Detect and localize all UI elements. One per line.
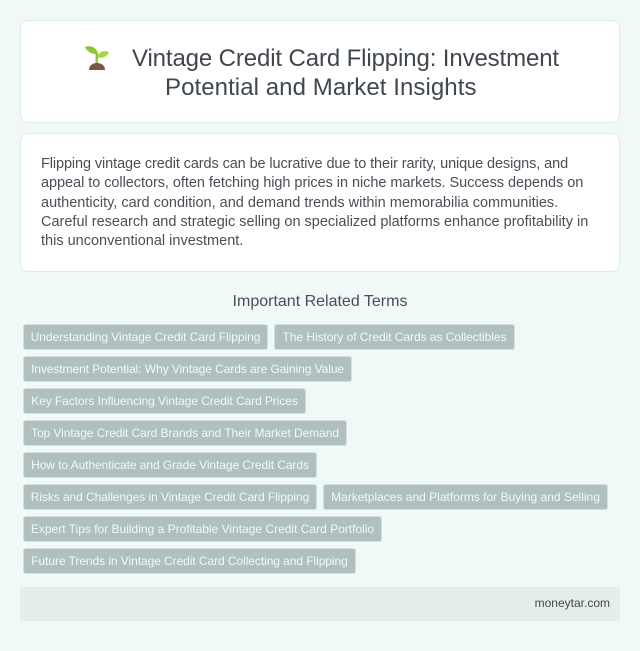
tag	[23, 452, 317, 478]
tag: Investment Potential: Why Vintage Cards are Gaining Value	[31, 362, 344, 376]
tag	[323, 484, 608, 510]
icon: seedling	[85, 46, 109, 70]
tag: Marketplaces and Platforms for Buying and Selling	[331, 490, 600, 504]
panel: title card	[20, 20, 620, 123]
heading: related terms: Important Related Terms	[233, 293, 407, 310]
tag	[23, 516, 382, 542]
panel: summary card	[20, 133, 620, 272]
summary text: this unconventional investment.	[41, 233, 243, 249]
tag: The History of Credit Cards as Collectibles	[283, 330, 506, 344]
summary text	[41, 156, 588, 249]
tag	[274, 324, 515, 350]
tag: Expert Tips for Building a Profitable Vintage Credit Card Portfolio	[31, 522, 374, 536]
tag	[23, 420, 347, 446]
tag	[23, 548, 356, 574]
tag list	[23, 324, 608, 574]
tag: How to Authenticate and Grade Vintage Credit Cards	[31, 458, 309, 472]
summary text: Flipping vintage credit cards can be lucrative due to their rarity, unique designs, and	[41, 156, 568, 172]
tag	[23, 324, 268, 350]
title line 1: Vintage Credit Card Flipping: Investment	[132, 45, 559, 72]
tag: Top Vintage Credit Card Brands and Their Market Demand	[31, 426, 339, 440]
tag: Risks and Challenges in Vintage Credit Card Flipping	[31, 490, 309, 504]
summary text: appeal to collectors, often fetching high prices in niche markets. Success depends on	[41, 175, 583, 191]
tag	[23, 484, 317, 510]
tag: Future Trends in Vintage Credit Card Collecting and Flipping	[31, 554, 348, 568]
tag: Key Factors Influencing Vintage Credit Card Prices	[31, 394, 298, 408]
tag	[23, 388, 306, 414]
title line 2: Potential and Market Insights	[165, 74, 477, 101]
tag: Understanding Vintage Credit Card Flipping	[31, 330, 260, 344]
footer bar	[20, 587, 620, 621]
summary text: Careful research and strategic selling on specialized platforms enhance profitability in	[41, 214, 588, 230]
tag	[23, 356, 352, 382]
summary text: authenticity, card condition, and demand trends within memorabilia communities.	[41, 195, 558, 211]
footer source: moneytar.com	[535, 596, 610, 610]
